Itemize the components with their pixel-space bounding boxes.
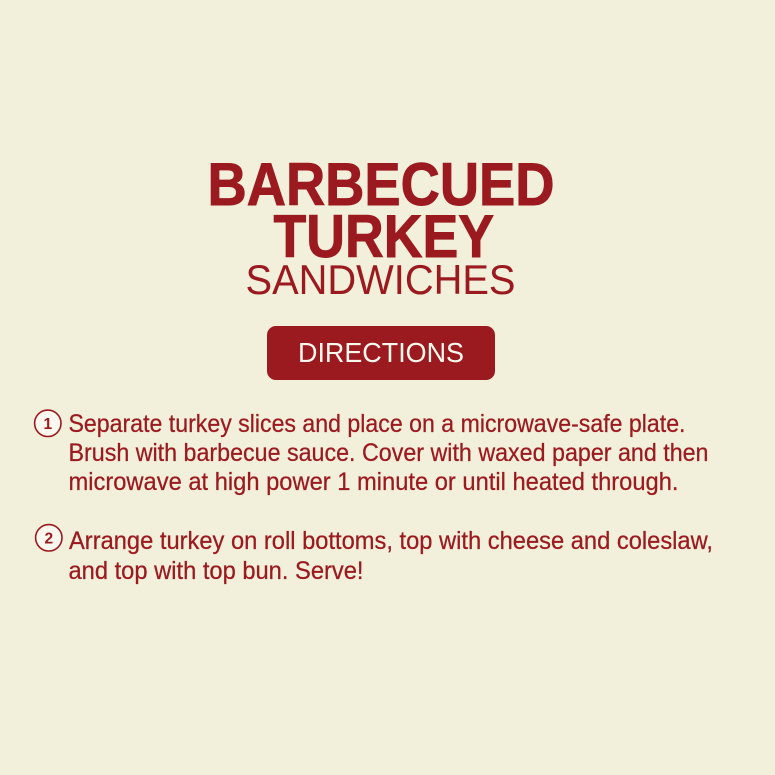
directions badge bbox=[267, 326, 495, 380]
step 1 number: 1 bbox=[43, 416, 52, 433]
step 2 number: 2 bbox=[44, 530, 53, 547]
step 2 text: and top with top bun. Serve! bbox=[68, 557, 364, 585]
step 1 text: microwave at high power 1 minute or until heated through. bbox=[68, 468, 678, 496]
step 2 text bbox=[68, 527, 713, 585]
title line: barbecued: BARBECUED bbox=[208, 151, 554, 218]
step 1 text bbox=[68, 410, 708, 496]
title bbox=[208, 151, 554, 303]
title line: sandwiches: SANDWICHES bbox=[246, 257, 516, 303]
step 2 number bbox=[36, 525, 62, 551]
step 2 text: Arrange turkey on roll bottoms, top with cheese and coleslaw, bbox=[69, 527, 713, 555]
step 1 text: Brush with barbecue sauce. Cover with waxed paper and then bbox=[68, 439, 708, 467]
step 1 text: Separate turkey slices and place on a microwave-safe plate. bbox=[68, 410, 686, 438]
step 1 number bbox=[35, 410, 61, 436]
title line: turkey: TURKEY bbox=[274, 203, 494, 270]
directions badge: DIRECTIONS bbox=[298, 337, 464, 368]
